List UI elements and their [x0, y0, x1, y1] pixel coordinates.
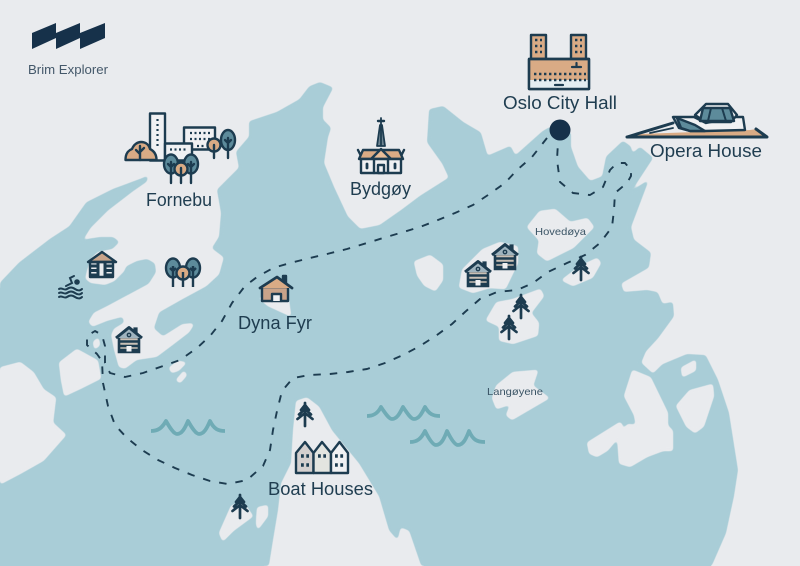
icon: island cabin left: [465, 262, 491, 286]
label: Boat Houses: Boat Houses: [268, 478, 373, 499]
water edge strips: [0, 282, 714, 566]
icon: Oslo City Hall: [529, 35, 589, 89]
icon: cabin on peninsula: [88, 252, 116, 277]
icon: Opera House: [627, 104, 767, 137]
label: Opera House: Opera House: [650, 140, 762, 161]
icon: pine south islet: [232, 495, 248, 518]
icon: swimmer: [59, 276, 82, 298]
icon: Bygdøy church: [358, 118, 404, 173]
land edge strip: [0, 370, 6, 481]
water waves: [151, 407, 485, 445]
brand name: Brim Explorer: [28, 63, 108, 77]
marker: Oslo pier: [550, 120, 570, 140]
icon: cabin by the strait: [116, 328, 142, 352]
icon: Fornebu city: [126, 114, 235, 183]
label: Oslo City Hall: Oslo City Hall: [503, 92, 617, 113]
boat route: [87, 138, 631, 484]
icon: Boat Houses: [296, 442, 348, 473]
icon: pine Boat Houses: [298, 403, 312, 426]
label: Fornebu: Fornebu: [146, 190, 212, 210]
icon: Dyna Fyr house: [260, 276, 292, 301]
label: Langøyene: Langøyene: [487, 386, 543, 398]
icon: island cabin right: [492, 244, 518, 269]
logo mark: [32, 23, 105, 49]
islands: [1, 210, 713, 540]
water: fjord: [1, 83, 737, 565]
icon: pine Hovedøya: [574, 257, 588, 280]
icon: trees: [166, 258, 200, 287]
icon: pine lower island: [502, 316, 516, 339]
label: Dyna Fyr: Dyna Fyr: [238, 312, 312, 333]
label: Hovedøya: Hovedøya: [535, 226, 586, 238]
label: Bygdøy: Bydgøy: [350, 179, 411, 199]
icon: pine upper island: [514, 295, 528, 318]
